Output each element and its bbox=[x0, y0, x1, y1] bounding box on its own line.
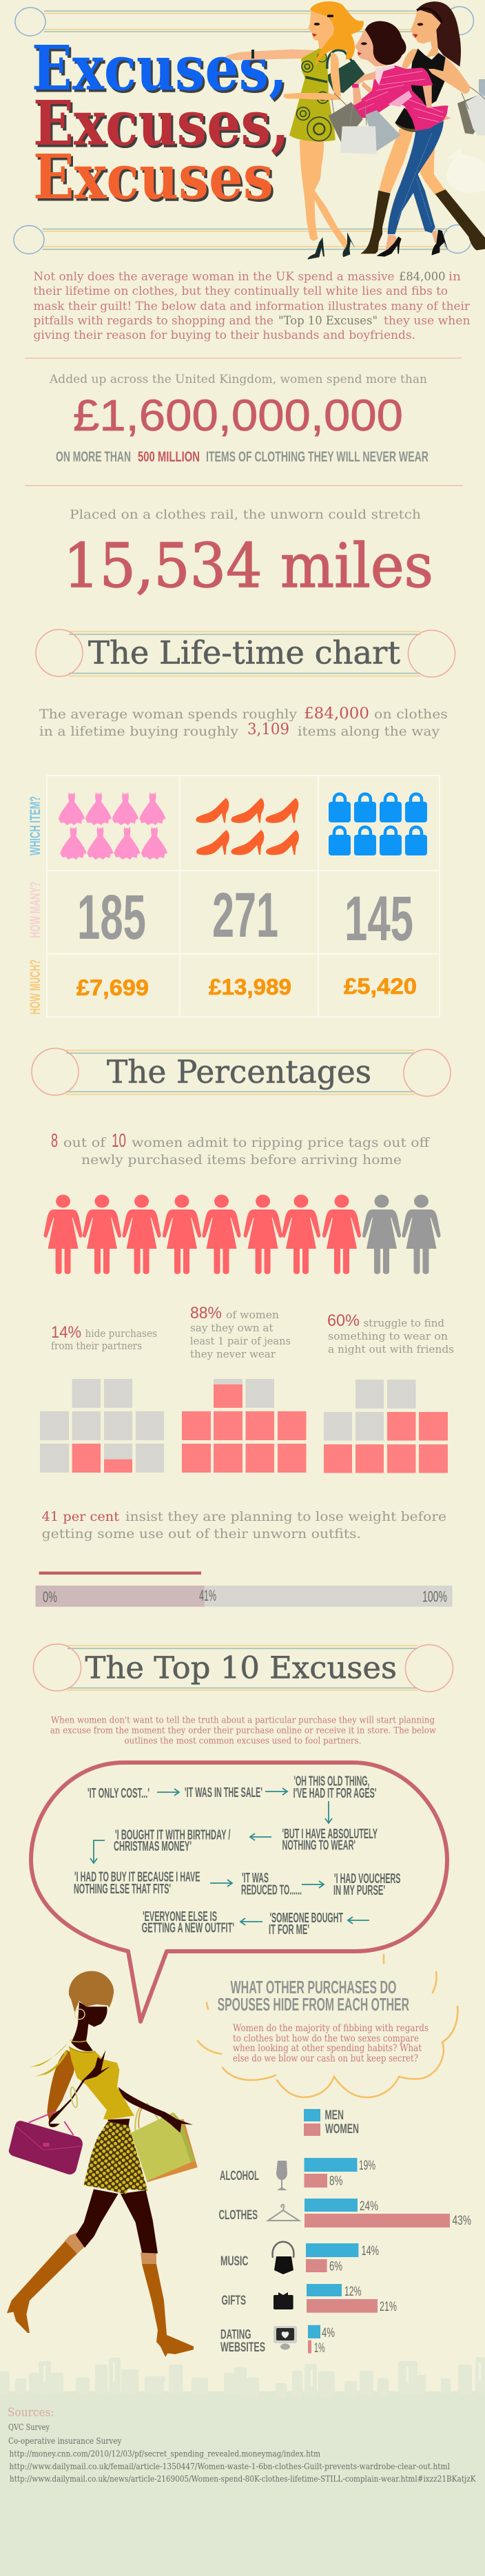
bar row: gifts: 12% bbox=[344, 2285, 362, 2299]
excuses list: 'BUT I HAVE ABSOLUTELY bbox=[282, 1827, 378, 1842]
bar row: music: 14% bbox=[361, 2244, 379, 2258]
stat: total spend: ON MORE THAN bbox=[56, 448, 131, 465]
title: Excuses bbox=[33, 141, 274, 213]
statement: 8 out of 10 bbox=[51, 1130, 431, 1167]
excuses list: NOTHING TO WEAR' bbox=[282, 1838, 355, 1853]
title: Excuses, bbox=[34, 34, 289, 106]
spouses paragraph: Women do the majority of fibbing with regards bbox=[233, 2023, 429, 2034]
stat: total spend: Added up across the United Kingdom, women spend more than bbox=[49, 373, 427, 386]
statement: 8 out of 10: women admit to ripping price tags out off bbox=[132, 1135, 431, 1150]
excuses list: 'EVERYONE ELSE IS bbox=[143, 1909, 217, 1924]
excuses list: 'OH THIS OLD THING, bbox=[293, 1774, 369, 1789]
intro paragraph: "Top 10 Excuses" bbox=[278, 314, 378, 328]
stat: total spend: £1,600,000,000 bbox=[73, 391, 403, 440]
row label: which item: WHICH ITEM? bbox=[28, 796, 43, 855]
excuses list: IT FOR ME' bbox=[269, 1922, 309, 1938]
stat: clothes rail distance: 15,534 miles bbox=[63, 530, 433, 601]
stat: 88 percent bbox=[182, 1304, 306, 1473]
city skyline footer bbox=[0, 2357, 485, 2576]
excuses list: REDUCED TO...... bbox=[241, 1883, 302, 1898]
legend bbox=[304, 2108, 359, 2137]
excuses list: 'SOMEONE BOUGHT bbox=[270, 1911, 343, 1926]
sources bbox=[8, 2406, 477, 2484]
progress bar: 41 percent: 100% bbox=[422, 1588, 447, 1606]
excuses list: CHRISTMAS MONEY' bbox=[114, 1839, 192, 1854]
header rails and rings bbox=[14, 7, 474, 253]
heading: the life-time chart: The Life-time chart bbox=[88, 634, 401, 671]
bar row: dating websites: 1% bbox=[314, 2341, 325, 2356]
spouses paragraph bbox=[233, 2023, 429, 2064]
bar row: gifts: GIFTS bbox=[222, 2294, 246, 2308]
excuses intro paragraph bbox=[50, 1716, 436, 1747]
intro paragraph: £84,000 bbox=[399, 270, 445, 284]
bar row: music: 6% bbox=[329, 2260, 342, 2274]
prices: £7,699 bbox=[76, 975, 149, 1000]
bar row: alcohol bbox=[220, 2158, 375, 2190]
excuses list bbox=[74, 1774, 401, 1938]
bar row: alcohol: ALCOHOL bbox=[220, 2169, 259, 2183]
stat: 60 percent: something to wear on bbox=[328, 1331, 448, 1342]
lifetime chart intro: 3,109 bbox=[247, 721, 289, 738]
excuses list: I'VE HAD IT FOR AGES' bbox=[293, 1786, 376, 1801]
illustration: woman walking with bags bbox=[7, 1971, 198, 2357]
title: Excuses, bbox=[35, 90, 291, 161]
legend: MEN bbox=[325, 2108, 344, 2123]
bar row: music bbox=[220, 2242, 379, 2274]
stat: 14 percent bbox=[40, 1323, 164, 1473]
stat: 60 percent: a night out with friends bbox=[328, 1344, 454, 1355]
heading: the top 10 excuses: The Top 10 Excuses bbox=[85, 1651, 397, 1686]
sources: http://money.cnn.com/2010/12/03/pf/secret_spending_revealed.moneymag/index.htm bbox=[10, 2449, 321, 2459]
bar row: gifts bbox=[222, 2284, 397, 2314]
lifetime chart intro: in a lifetime buying roughly bbox=[39, 725, 239, 739]
title: Excuses bbox=[35, 143, 276, 215]
lifetime chart intro: on clothes bbox=[374, 707, 448, 722]
stat: 60 percent: struggle to find bbox=[364, 1318, 444, 1329]
spouses paragraph: to clothes but how do the two sexes compare bbox=[233, 2033, 419, 2044]
lifetime chart intro: £84,000 bbox=[304, 705, 369, 723]
icons: dresses bbox=[59, 792, 167, 860]
spouses heading bbox=[218, 1977, 409, 2015]
stat: 60 percent: 60% bbox=[327, 1311, 360, 1330]
title: Excuses, bbox=[33, 87, 289, 159]
bar row: dating websites bbox=[220, 2325, 335, 2356]
stat: 88 percent: say they own at bbox=[190, 1323, 274, 1334]
stat: 60 percent bbox=[324, 1311, 454, 1473]
excuses list: 'IT ONLY COST...' bbox=[87, 1786, 149, 1801]
statement: 41 per cent: 41 per cent bbox=[42, 1509, 119, 1524]
progress bar: 41 percent: 41% bbox=[199, 1587, 216, 1604]
statement: 8 out of 10: newly purchased items before arriving home bbox=[81, 1152, 402, 1167]
excuses list: 'I HAD TO BUY IT BECAUSE I HAVE bbox=[74, 1870, 200, 1885]
intro paragraph: mask their guilt! The below data and information illustrates many of their bbox=[33, 300, 471, 313]
prices bbox=[76, 974, 417, 1000]
heading: the life-time chart bbox=[36, 630, 455, 677]
bar row: alcohol: 8% bbox=[329, 2174, 343, 2189]
title: Excuses, bbox=[32, 32, 287, 104]
statement: 8 out of 10: 10 bbox=[112, 1130, 126, 1151]
heading: the percentages bbox=[32, 1048, 451, 1097]
stat: 88 percent: 88% bbox=[190, 1304, 222, 1322]
prices: £13,989 bbox=[209, 975, 291, 999]
intro paragraph: in bbox=[448, 270, 461, 284]
icon: wine glass bbox=[276, 2161, 287, 2190]
spouses paragraph: else do we blow our cash on but keep secret? bbox=[233, 2053, 418, 2064]
legend: WOMEN bbox=[325, 2122, 359, 2137]
excuses intro paragraph: When women don't want to tell the truth about a particular purchase they will start planning bbox=[51, 1716, 435, 1726]
lifetime chart intro bbox=[39, 705, 448, 739]
bar row: alcohol: 19% bbox=[359, 2159, 375, 2173]
row label: how many: HOW MANY? bbox=[28, 882, 43, 938]
statement: 41 per cent: getting some use out of their unworn outfits. bbox=[42, 1526, 361, 1541]
speech bubble outline bbox=[31, 1763, 447, 2022]
counts bbox=[77, 880, 413, 954]
progress bar: 41 percent: 0% bbox=[43, 1588, 57, 1606]
intro paragraph bbox=[33, 270, 471, 342]
excuses list: 'IT WAS IN THE SALE' bbox=[185, 1785, 262, 1800]
excuses intro paragraph: an excuse from the moment they order their purchase online or receive it in store. The below bbox=[50, 1726, 436, 1736]
lifetime chart intro: The average woman spends roughly bbox=[39, 707, 298, 722]
stat: 88 percent: least 1 pair of jeans bbox=[190, 1336, 291, 1347]
lifetime chart intro: items along the way bbox=[298, 725, 440, 739]
excuses intro paragraph: outlines the most common excuses used to fool partners. bbox=[124, 1736, 361, 1747]
progress bar: 41 percent bbox=[36, 1572, 453, 1607]
stat: total spend bbox=[25, 358, 463, 486]
statement: 41 per cent: insist they are planning to lose weight before bbox=[125, 1509, 446, 1524]
icon: headphones bbox=[273, 2242, 293, 2274]
intro paragraph: they use when bbox=[384, 314, 471, 328]
icon: hanger bbox=[268, 2205, 299, 2221]
bar row: clothes: 24% bbox=[360, 2199, 378, 2214]
sources: Sources: bbox=[8, 2406, 54, 2420]
icon: gift box bbox=[274, 2292, 293, 2309]
bar row: clothes bbox=[219, 2199, 471, 2228]
bar row: music: MUSIC bbox=[220, 2254, 249, 2269]
counts: 145 bbox=[344, 884, 413, 954]
excuses list: GETTING A NEW OUTFIT' bbox=[142, 1921, 234, 1936]
stat: 88 percent: of women bbox=[226, 1310, 279, 1321]
stat: total spend: 500 MILLION bbox=[138, 448, 200, 465]
excuses list: 'I HAD VOUCHERS bbox=[334, 1871, 401, 1887]
pictogram: 8 of 10 women bbox=[44, 1194, 441, 1274]
counts: 271 bbox=[212, 880, 278, 951]
excuses list: 'IT WAS bbox=[242, 1871, 269, 1886]
heading: the percentages: The Percentages bbox=[107, 1053, 371, 1090]
bar row: dating websites: WEBSITES bbox=[220, 2340, 265, 2355]
title bbox=[32, 32, 291, 215]
thought cloud outline bbox=[198, 1955, 457, 2097]
stat: 88 percent: they never wear bbox=[190, 1349, 276, 1360]
excuses list: 'I BOUGHT IT WITH BIRTHDAY / bbox=[115, 1828, 231, 1843]
sources: Co-operative insurance Survey bbox=[8, 2436, 122, 2446]
stat: 14 percent: hide purchases bbox=[85, 1329, 157, 1340]
lifetime chart grid bbox=[28, 776, 440, 1017]
stat: clothes rail distance: Placed on a clothes rail, the unworn could stretch bbox=[70, 508, 421, 522]
prices: £5,420 bbox=[344, 974, 417, 999]
intro paragraph: giving their reason for buying to their husbands and boyfriends. bbox=[33, 329, 415, 342]
counts: 185 bbox=[77, 882, 146, 953]
intro paragraph: their lifetime on clothes, but they continually tell white lies and fibs to bbox=[33, 284, 448, 298]
spouses paragraph: when looking at other spending habits? What bbox=[233, 2043, 422, 2054]
intro paragraph: pitfalls with regards to shopping and the bbox=[33, 314, 274, 328]
bar row: dating websites: DATING bbox=[220, 2328, 251, 2343]
excuses list: NOTHING ELSE THAT FITS' bbox=[74, 1882, 171, 1897]
icons: shoes bbox=[196, 798, 299, 855]
statement: 41 per cent bbox=[42, 1509, 446, 1541]
sources: QVC Survey bbox=[8, 2422, 50, 2432]
bar row: clothes: 43% bbox=[452, 2214, 471, 2228]
excuses list: IN MY PURSE' bbox=[333, 1883, 385, 1898]
stat: 14 percent: 14% bbox=[51, 1323, 81, 1342]
icons: handbags bbox=[329, 794, 427, 855]
statement: 8 out of 10: 8 bbox=[51, 1130, 58, 1151]
heading: the top 10 excuses bbox=[33, 1644, 453, 1692]
stat: 14 percent: from their partners bbox=[51, 1341, 142, 1352]
bar row: gifts: 21% bbox=[380, 2300, 397, 2314]
row label: how much: HOW MUCH? bbox=[28, 959, 43, 1015]
bar row: clothes: CLOTHES bbox=[219, 2208, 258, 2223]
intro paragraph: Not only does the average woman in the UK spend a massive bbox=[33, 270, 394, 284]
illustration: three women shopping bbox=[225, 1, 485, 260]
statement: 8 out of 10: out of bbox=[63, 1135, 107, 1150]
arrows between excuses bbox=[90, 1788, 369, 1925]
icon: heart monitor bbox=[274, 2326, 297, 2350]
bar row: dating websites: 4% bbox=[322, 2326, 335, 2340]
